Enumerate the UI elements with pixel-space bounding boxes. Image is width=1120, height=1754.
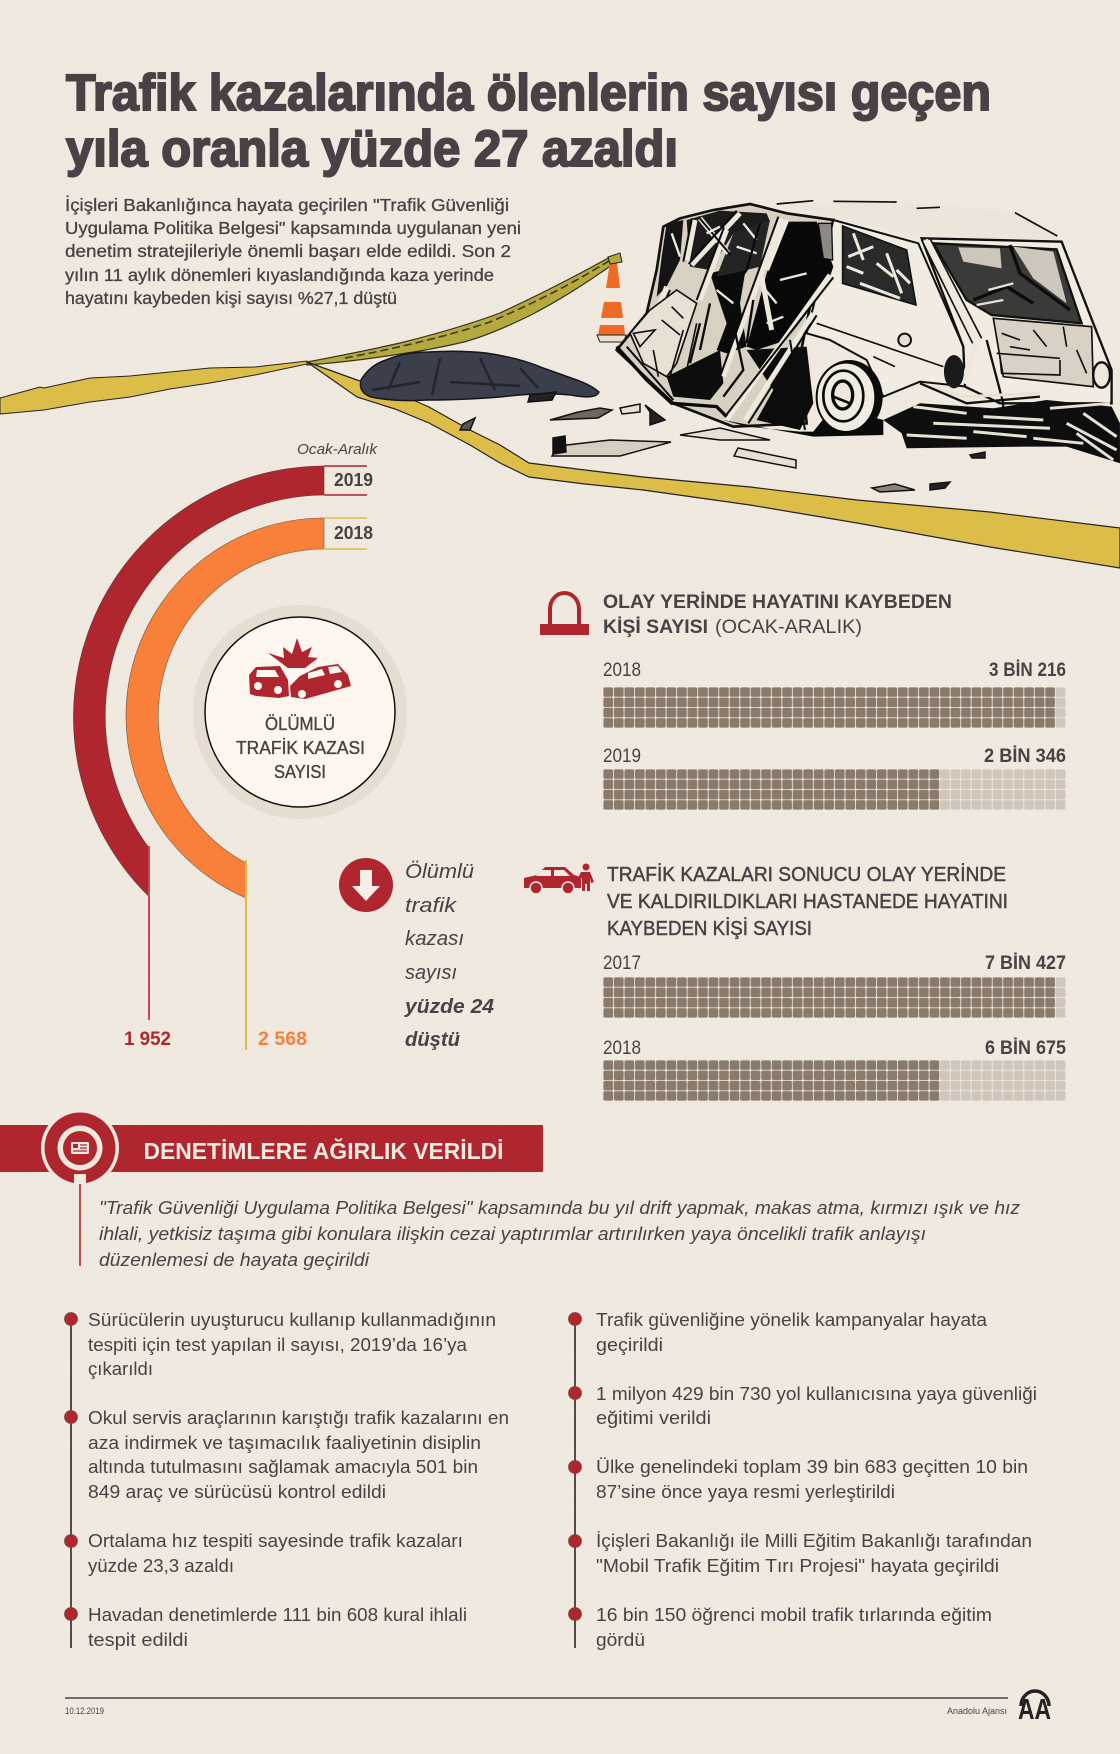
quote text: düzenlemesi de hayata geçirildi — [99, 1249, 370, 1270]
panel: deaths at scene and hospital — [524, 863, 1066, 1101]
intro text: Uygulama Politika Belgesi" kapsamında uygulanan yeni — [65, 218, 521, 238]
callout: crash count fell 24 percent: kazası — [405, 928, 464, 950]
icon: car crash — [249, 638, 351, 699]
bullet text 4: İçişleri Bakanlığı ile Milli Eğitim Bakanlığı tarafından — [596, 1530, 1032, 1551]
bullet text 3: Ülke genelindeki toplam 39 bin 683 geçitten 10 bin — [596, 1456, 1028, 1477]
row: 2018 value: 2018 — [603, 1038, 641, 1059]
chart: 2019 arc — [73, 466, 373, 1020]
badge text: ÖLÜMLÜ — [265, 714, 335, 734]
row: 2019 value — [603, 746, 1066, 767]
bullet text 2: 849 araç ve sürücüsü kontrol edildi — [88, 1481, 386, 1502]
wheel — [816, 360, 883, 435]
row: 2017 value: 7 BİN 427 — [985, 953, 1066, 974]
row: 2019 value: 2019 — [603, 746, 641, 767]
intro text: İçişleri Bakanlığınca hayata geçirilen "Trafik Güvenliği — [65, 195, 509, 215]
quote text: "Trafik Güvenliği Uygulama Politika Belgesi" kapsamında bu yıl drift yapmak, makas atma, kırmızı ışık ve hız — [99, 1197, 1020, 1218]
callout: crash count fell 24 percent: trafik — [405, 895, 457, 917]
chart value: 1 952: 1 952 — [124, 1029, 171, 1050]
intro text: yılın 11 aylık dönemleri kıyaslandığında kaza yerinde — [65, 265, 494, 285]
bullet text 2 — [596, 1383, 1037, 1428]
row: 2018 value — [603, 1038, 1066, 1059]
heading: VE KALDIRILDIKLARI HASTANEDE HAYATINI — [607, 891, 1008, 913]
bullet list: left — [64, 1309, 509, 1650]
illustration: debris — [460, 392, 985, 492]
unit bar: 2018 — [603, 1060, 1066, 1101]
bullet text 5 — [596, 1604, 992, 1650]
title — [66, 64, 991, 177]
bullet text 5: 16 bin 150 öğrenci mobil trafik tırlarında eğitim — [596, 1604, 992, 1625]
center badge: SAYISI — [274, 762, 326, 782]
heading: TRAFİK KAZALARI SONUCU OLAY YERİNDE — [607, 863, 1006, 886]
chart label: 2018: 2018 — [334, 523, 373, 543]
intro text — [65, 195, 521, 308]
chart: period label: Ocak-Aralık — [297, 441, 379, 458]
center badge — [193, 605, 407, 819]
chart value: 2 568: 2 568 — [258, 1029, 307, 1050]
bullet text 2: aza indirmek ve taşımacılık faaliyetinin disiplin — [88, 1432, 481, 1453]
dark interior — [747, 222, 833, 350]
icon: barrier dome — [540, 593, 589, 635]
row: 2017 value: 2017 — [603, 953, 641, 974]
bullet text 1 — [88, 1309, 496, 1379]
icon: down arrow — [339, 858, 393, 912]
illustration: traffic cone — [597, 253, 626, 342]
tailgate — [993, 318, 1093, 387]
chart label: 2019: 2019 — [334, 470, 373, 490]
icon: car and person — [524, 864, 594, 894]
callout: crash count fell 24 percent: sayısı — [405, 962, 457, 984]
row: 2018 value: 2018 — [603, 660, 641, 681]
bullet text 1 — [596, 1309, 988, 1355]
bullet text 2 — [88, 1407, 509, 1502]
crumpled bars — [647, 213, 830, 420]
callout: crash count fell 24 percent — [404, 861, 494, 1051]
heading: KAYBEDEN KİŞİ SAYISI — [607, 917, 812, 940]
icon: id card — [71, 1142, 89, 1154]
bullet text 4: Havadan denetimlerde 111 bin 608 kural ihlali — [88, 1604, 467, 1625]
callout: crash count fell 24 percent: düştü — [405, 1029, 460, 1051]
heading: OLAY YERİNDE HAYATINI KAYBEDEN — [603, 590, 952, 613]
unit bar: 2018 — [603, 687, 1066, 728]
bullet text 2: eğitimi verildi — [596, 1407, 711, 1428]
bullet text 1: Sürücülerin uyuşturucu kullanıp kullanmadığının — [88, 1309, 496, 1330]
body details — [817, 323, 943, 367]
callout: crash count fell 24 percent: Ölümlü — [405, 861, 474, 883]
panel: deaths at scene — [540, 590, 1066, 810]
illustration: covered body — [360, 351, 599, 401]
icon: agency logo: AA — [1018, 1694, 1051, 1726]
bullet text 3 — [88, 1530, 463, 1576]
bullet text 4 — [88, 1604, 467, 1650]
bullet text 5: gördü — [596, 1629, 645, 1650]
row: 2017 value — [603, 953, 1066, 974]
bullet text 2: Okul servis araçlarının karıştığı trafik kazalarını en — [88, 1407, 509, 1428]
unit bar: 2019 — [603, 769, 1066, 810]
quote text: ihlali, yetkisiz taşıma gibi konulara ilişkin cezai yaptırımlar artırılırken yaya öncelikli trafik anlayışı — [99, 1223, 926, 1244]
intro text: hayatını kaybeden kişi sayısı %27,1 düştü — [65, 288, 397, 308]
illustration: wrecked car — [617, 201, 1120, 463]
quote text — [99, 1197, 1020, 1270]
bullet text 2: altında tutulmasını sağlamak amacıyla 501 bin — [88, 1456, 478, 1477]
bullet text 3: yüzde 23,3 azaldı — [88, 1555, 234, 1576]
bullet text 1: tespiti için test yapılan il sayısı, 2019’da 16’ya — [88, 1334, 468, 1355]
chart: 2018 arc — [126, 518, 373, 1050]
bullet text 1: geçirildi — [596, 1334, 663, 1355]
bullet text 4 — [596, 1530, 1032, 1576]
row: 2018 value: 3 BİN 216 — [989, 660, 1066, 681]
bullet text 3: Ortalama hız tespiti sayesinde trafik kazaları — [88, 1530, 463, 1551]
callout: crash count fell 24 percent: yüzde 24 — [404, 996, 494, 1018]
bullet text 1: Trafik güvenliğine yönelik kampanyalar hayata — [596, 1309, 988, 1330]
date: 10.12.2019 — [65, 1706, 104, 1716]
side window — [843, 226, 916, 305]
title: Trafik kazalarında ölenlerin sayısı geçen — [66, 64, 991, 121]
bullet text 3 — [596, 1456, 1028, 1502]
heading: KİŞİ SAYISI — [603, 615, 708, 638]
heading — [603, 590, 952, 638]
bullet text 3: 87’sine önce yaya resmi yerleştirildi — [596, 1481, 895, 1502]
bullet text 4: "Mobil Trafik Eğitim Tırı Projesi" hayata geçirildi — [596, 1555, 999, 1576]
source: Anadolu Ajansı — [947, 1706, 1007, 1716]
row: 2018 value — [603, 660, 1066, 681]
unit bar: 2017 — [603, 977, 1066, 1018]
banner heading: DENETİMLERE AĞIRLIK VERİLDİ — [144, 1137, 504, 1164]
heading: (OCAK-ARALIK) — [715, 616, 862, 638]
heading — [607, 863, 1008, 940]
bullet text 4: tespit edildi — [88, 1629, 188, 1650]
rear window — [933, 243, 1082, 323]
intro text: denetim stratejileriyle önemli başarı elde edildi. Son 2 — [65, 241, 511, 261]
row: 2019 value: 2 BİN 346 — [984, 746, 1066, 767]
bullet dots — [568, 1312, 582, 1620]
bullet text 2: 1 milyon 429 bin 730 yol kullanıcısına yaya güvenliği — [596, 1383, 1037, 1404]
bullet text 1: çıkarıldı — [88, 1358, 153, 1379]
title: yıla oranla yüzde 27 azaldı — [66, 120, 678, 177]
row: 2018 value: 6 BİN 675 — [985, 1038, 1066, 1059]
bullet list: right — [568, 1309, 1037, 1650]
section banner — [0, 1109, 543, 1187]
footer — [65, 1691, 1051, 1726]
center badge: TRAFİK KAZASI — [236, 738, 365, 758]
underbody shadow — [883, 400, 1120, 463]
bullet dots — [64, 1312, 78, 1620]
illustration: police tape — [0, 257, 1120, 568]
